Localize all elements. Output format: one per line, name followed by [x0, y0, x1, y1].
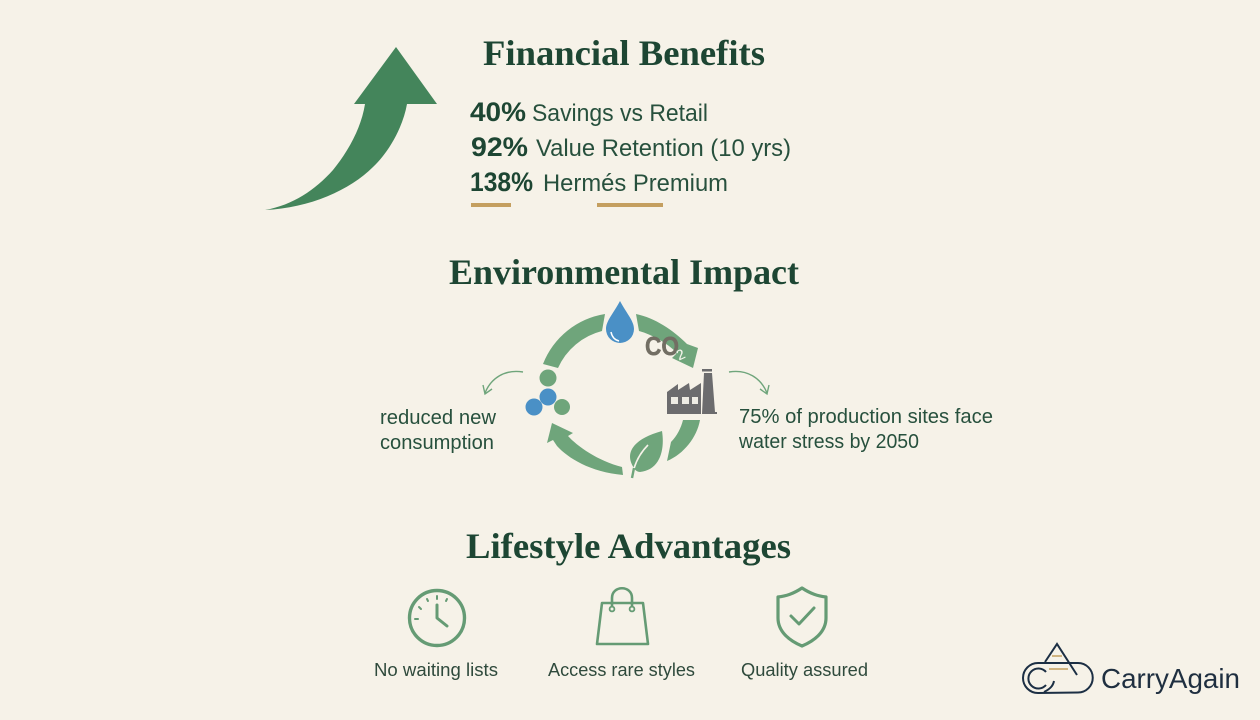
- label: no waiting lists: No waiting lists: [374, 660, 498, 680]
- heading: lifestyle advantages: Lifestyle Advantages: [466, 526, 791, 566]
- panel: lifestyle advantages: [374, 526, 868, 680]
- icon: shield with check: [778, 588, 826, 646]
- text: water stress statistic: 75% of production sites face: [739, 406, 993, 428]
- panel: financial benefits: [265, 33, 791, 210]
- arc: top left segment: [543, 314, 605, 368]
- stat: value retention: Value Retention (10 yrs): [536, 135, 791, 162]
- arrow: left callout: [483, 371, 523, 394]
- icon: clock: [410, 590, 464, 646]
- arrow: bottom left segment: [547, 423, 623, 475]
- label: access rare styles: Access rare styles: [548, 660, 695, 680]
- stat: hermes premium: Hermés Premium: [543, 170, 728, 197]
- icon: co2 label: 2: [674, 346, 688, 365]
- text: reduced new consumption: reduced new: [380, 407, 497, 429]
- logo mark: [1023, 644, 1093, 693]
- icon: molecule circles: [526, 370, 570, 416]
- logo: carryagain: [1023, 644, 1240, 694]
- text: water stress statistic: [738, 406, 993, 453]
- arrow: right callout: [729, 371, 769, 394]
- stat: value retention: 92%: [471, 132, 528, 162]
- arrow: top right segment: [636, 314, 698, 368]
- stat: hermes premium: [470, 167, 728, 197]
- chart: circular lifecycle ring: [526, 301, 717, 478]
- panel: environmental impact: [380, 252, 993, 478]
- text: reduced new consumption: [380, 407, 497, 454]
- text: reduced new consumption: consumption: [380, 432, 494, 454]
- heading: financial benefits: Financial Benefits: [483, 33, 765, 73]
- gold underlines: [471, 203, 663, 207]
- icon: shopping bag: [597, 588, 648, 644]
- icon: factory: [667, 369, 717, 414]
- icon: leaf: [630, 431, 663, 478]
- icon: co2 label: CO: [645, 331, 679, 361]
- stat: savings vs retail: Savings vs Retail: [532, 100, 708, 127]
- stat: savings vs retail: [470, 97, 708, 127]
- icon: water drop: [606, 301, 634, 343]
- arc: bottom right segment: [667, 420, 700, 461]
- text: water stress statistic: water stress by 2050: [738, 431, 919, 453]
- wordmark: CarryAgain: [1101, 663, 1240, 694]
- stat: savings vs retail: 40%: [470, 97, 526, 127]
- heading: environmental impact: Environmental Impact: [449, 252, 799, 292]
- label: quality assured: Quality assured: [741, 660, 868, 680]
- stat: hermes premium: 138%: [470, 167, 533, 197]
- icon: rising green arrow: [265, 47, 437, 210]
